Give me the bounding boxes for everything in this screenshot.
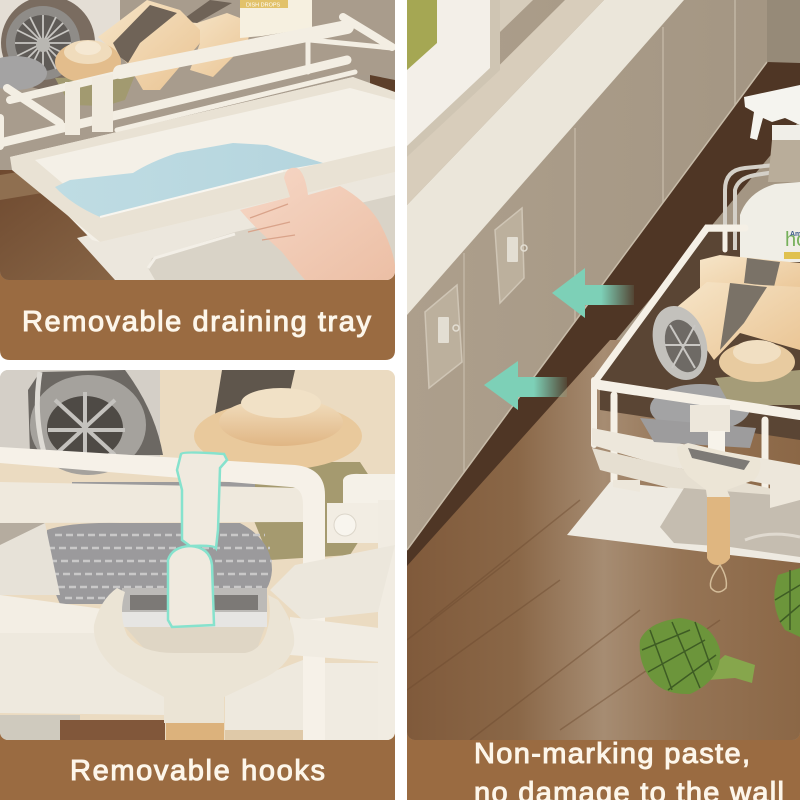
sponges: [190, 13, 249, 77]
steel wool: [72, 482, 255, 487]
caption text: Removable draining tray: [22, 306, 372, 338]
caption text: Removable hooks: [70, 755, 325, 787]
wooden handle: [166, 723, 224, 740]
skirting: [407, 62, 800, 590]
caption bar: removable hooks: [0, 730, 395, 800]
photo: wall and rack: [407, 0, 800, 740]
steel drain: [28, 370, 163, 455]
sink: [567, 482, 800, 563]
rack: [0, 17, 392, 146]
wooden brush: [55, 44, 121, 81]
artichoke centre: [640, 618, 755, 694]
water in tray: [55, 143, 323, 217]
photo: hook close-up: [0, 370, 395, 740]
hand: [240, 168, 395, 280]
highlighted hook: [168, 452, 227, 627]
panel: removable hooks: [0, 370, 395, 800]
wooden brush: [715, 370, 800, 405]
arrow upper: [552, 268, 634, 318]
caption text: Non-marking paste,: [474, 738, 750, 770]
tray: [10, 77, 395, 242]
rack bars: [0, 482, 304, 523]
windowsill: [407, 0, 684, 315]
artichoke right: [774, 568, 800, 637]
spray bottle: [740, 85, 800, 262]
rack interior shadow: [600, 232, 800, 440]
panel: non-marking paste: [407, 0, 800, 800]
photo: tray being removed: DISH DROPS: [246, 2, 281, 8]
sponges: [700, 255, 800, 288]
dark sponge band: [215, 370, 295, 414]
caption text: [474, 738, 784, 800]
bristles: [55, 75, 135, 106]
steel wool: [650, 384, 750, 432]
steel wool: [0, 56, 47, 90]
squeegee with wooden handle: [677, 430, 760, 592]
handle loops: [725, 165, 775, 250]
right post over sink: [613, 480, 640, 492]
rack lower tray: [592, 428, 800, 490]
squeegee handle: [94, 588, 294, 723]
bottle: [240, 0, 312, 38]
bristles: [254, 462, 368, 560]
photo: tray being removed: [0, 0, 395, 280]
wooden brush: [194, 408, 362, 468]
window picture: [407, 0, 437, 70]
adhesive hook 2: [495, 208, 527, 303]
panel: removable draining tray: [0, 0, 395, 360]
arrow lower: [484, 361, 567, 410]
rack: [594, 228, 800, 505]
adhesive hook 1: [425, 285, 462, 388]
sink: [77, 160, 395, 280]
squeegee blade: [122, 588, 267, 612]
steel drain: [644, 299, 716, 387]
caption bar: removable draining tray: [0, 270, 395, 360]
caption bar: non-marking paste: [407, 730, 800, 800]
steel drain: [1, 0, 95, 90]
countertop: [407, 340, 800, 740]
tile joints: [464, 0, 735, 490]
